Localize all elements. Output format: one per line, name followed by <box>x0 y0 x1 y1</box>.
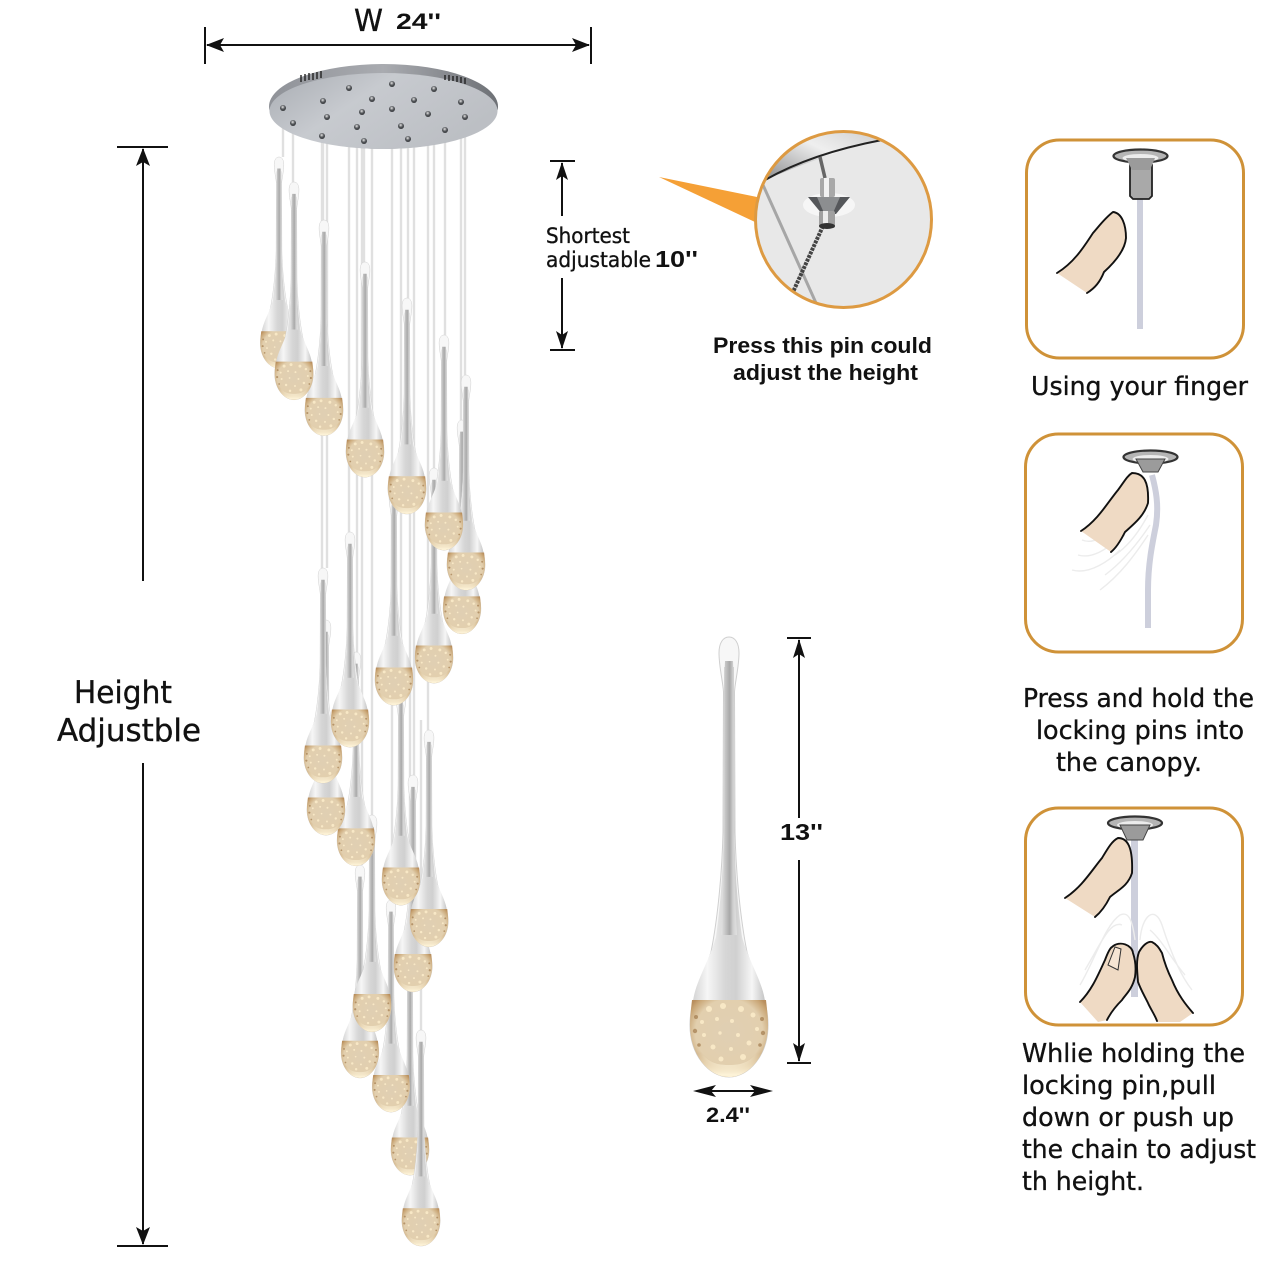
width dimension: W 24 inch: W <box>354 4 383 39</box>
single pendant detail <box>690 637 768 1077</box>
caption: press and hold: Press and hold the <box>1023 684 1254 714</box>
shortest adjustable dimension: Shortest <box>546 224 630 248</box>
pendant height dimension 13 inch <box>780 638 823 1063</box>
icon: canopy with bent cord <box>1124 450 1178 628</box>
shortest adjustable dimension: 10'' <box>655 246 698 272</box>
shortest adjustable dimension: adjustable <box>546 248 651 272</box>
panel: step 1 using your finger <box>1026 140 1244 358</box>
width dimension: W 24 inch <box>205 4 591 64</box>
caption: pull or push instructions <box>1022 1039 1256 1197</box>
icon: canopy and cord <box>1114 150 1168 329</box>
callout pointer <box>659 177 757 222</box>
caption: press and hold: the canopy. <box>1056 748 1202 778</box>
suspension cords <box>283 84 465 1030</box>
chandelier <box>260 64 498 1246</box>
caption: pull or push instructions: the chain to adjust <box>1022 1135 1256 1165</box>
caption: press and hold: locking pins into <box>1036 716 1244 746</box>
canopy plate <box>269 64 498 149</box>
shortest adjustable dimension <box>546 161 698 350</box>
label: height adjustable: Adjustble <box>57 713 201 749</box>
panel: step 3 pull or push <box>1026 808 1242 1025</box>
height dimension arrow <box>117 147 168 1246</box>
caption: press and hold <box>1023 684 1254 778</box>
caption: pull or push instructions: Whlie holding the <box>1022 1039 1245 1069</box>
width dimension: W 24 inch: 24'' <box>396 9 441 34</box>
caption: press this pin: Press this pin could <box>713 333 932 358</box>
icon: upper finger <box>1065 838 1132 917</box>
pendant width dimension 2.4 inch <box>693 1085 773 1127</box>
pendant width dimension 2.4 inch: 2.4'' <box>706 1104 750 1127</box>
pendant height dimension 13 inch: 13'' <box>780 819 823 845</box>
caption: using your finger: Using your finger <box>1031 372 1248 402</box>
icon: canopy and straight cord <box>1108 816 1162 997</box>
magnified locking pin detail <box>750 120 932 308</box>
icon: pinching fingers <box>1080 914 1193 1022</box>
caption: press this pin: adjust the height <box>733 360 919 385</box>
caption: pull or push instructions: locking pin,pull <box>1022 1071 1216 1101</box>
label: height adjustable: Height <box>74 675 172 711</box>
caption: pull or push instructions: th height. <box>1022 1167 1144 1197</box>
label: height adjustable <box>57 675 201 749</box>
caption: pull or push instructions: down or push up <box>1022 1103 1234 1133</box>
caption: press this pin <box>713 333 932 385</box>
icon: finger pressing pin <box>1072 473 1150 590</box>
panel: step 2 press and hold <box>1026 434 1242 652</box>
teardrop pendants <box>260 157 485 1246</box>
icon: finger <box>1057 212 1126 293</box>
